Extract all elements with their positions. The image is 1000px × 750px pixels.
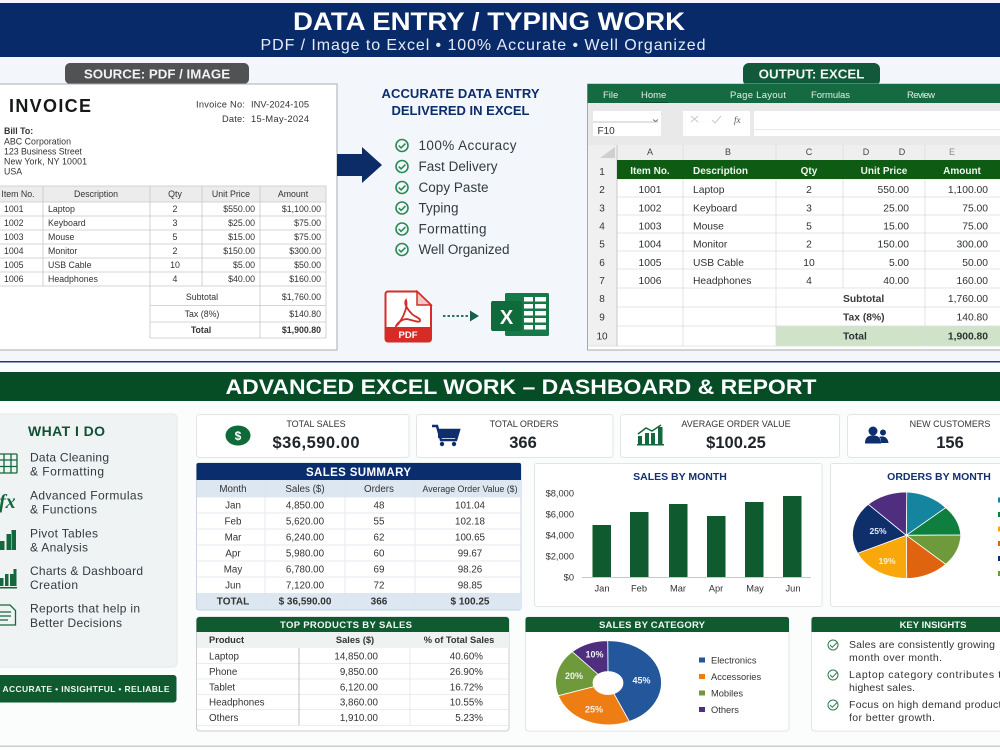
icon: Excel file: X [500, 307, 514, 329]
invoice table: $140.80 [289, 309, 321, 319]
green totals row [776, 326, 1000, 346]
KPI: total orders: TOTAL ORDERS [490, 419, 558, 429]
tagline ribbon [0, 675, 176, 702]
ribbon: File [603, 90, 618, 101]
table: sales summary: May [224, 564, 242, 576]
sheet data: Keyboard [693, 204, 737, 214]
table: sales summary: Apr [225, 548, 241, 560]
sheet data [639, 185, 988, 342]
invoice table: 1005 [4, 260, 24, 270]
sheet data: 1004 [639, 240, 662, 250]
table: sales summary: 366 [371, 596, 388, 608]
icon: PDF file: PDF [398, 330, 418, 341]
chart: sales by month: SALES BY MONTH [633, 471, 727, 483]
center heading [382, 86, 540, 118]
x axis labels: Mar [670, 584, 686, 594]
arrow: PDF to Excel [443, 310, 479, 322]
KPI: total orders: 366 [509, 434, 537, 452]
invoice table: USB Cable [48, 260, 92, 270]
item: Copy Paste: Copy Paste [418, 180, 488, 195]
invoice table: Keyboard [48, 218, 86, 228]
table: sales summary: Sales ($) [285, 484, 325, 495]
ribbon: Page Layout [730, 90, 786, 101]
invoice table: 1001 [4, 204, 24, 214]
service: pivot tables: Pivot Tables [30, 526, 98, 540]
table: sales summary: 60 [374, 548, 385, 560]
sheet data: 1,900.80 [948, 332, 988, 342]
legend [699, 656, 761, 715]
main title: DATA ENTRY / TYPING WORK [293, 8, 685, 36]
y axis labels: $6,000 [546, 510, 574, 520]
legend swatches [998, 498, 1000, 576]
KPI: average order value: $100.25 [706, 434, 766, 452]
section divider [0, 361, 1000, 362]
invoice table: $15.00 [228, 232, 255, 242]
table: sales summary: 101.04 [455, 500, 486, 512]
KPI: new customers: 156 [936, 434, 964, 452]
invoice table: 1003 [4, 232, 24, 242]
table: top products: 3,860.00 [340, 698, 379, 708]
chart: orders by month: 19% [878, 556, 896, 566]
table: top products: 1,910.00 [340, 713, 379, 724]
bill to: USA [4, 166, 22, 176]
y axis labels: $2,000 [546, 552, 574, 562]
y axis labels: $8,000 [546, 488, 574, 498]
invoice table: $550.00 [223, 204, 255, 214]
chart: sales by month [534, 464, 822, 606]
invoice table: Unit Price [212, 189, 250, 199]
table: top products: 10.55% [450, 698, 483, 708]
arrow: source to output [337, 147, 382, 183]
table: top products: Others [209, 713, 239, 724]
sheet data: 5 [806, 222, 812, 232]
invoice table: $160.00 [289, 274, 321, 284]
y axis labels: $4,000 [546, 530, 574, 540]
sheet header row [617, 160, 1000, 179]
subtitle: PDF / Image to Excel • 100% Accurate • Well Organized [260, 37, 706, 54]
invoice table: Qty [168, 189, 182, 199]
x axis labels [594, 584, 800, 594]
invoice table: 1002 [4, 218, 24, 228]
KPI: total sales: TOTAL SALES [286, 419, 346, 429]
KPI: total sales [196, 414, 409, 458]
sheet data: 160.00 [956, 276, 988, 287]
benefits checklist [396, 138, 517, 257]
column headers: B [725, 147, 731, 157]
sheet data: 4 [806, 276, 812, 287]
service: charts: Charts & Dashboard [30, 564, 143, 578]
chart title [526, 617, 789, 632]
column headers: A [647, 147, 653, 157]
invoice meta: Invoice No: [196, 100, 245, 110]
bill to: ABC Corporation [4, 136, 71, 146]
service: data cleaning: & Formatting [30, 464, 104, 478]
service: formulas [0, 488, 143, 516]
footer rule [0, 746, 1000, 747]
sheet header row: Qty [801, 166, 818, 177]
sheet data: 75.00 [962, 204, 988, 214]
chart: orders by month: ORDERS BY MONTH [887, 471, 991, 483]
table title: SALES SUMMARY [306, 467, 411, 479]
table: sales summary: Mar [225, 532, 242, 544]
service: data cleaning [0, 450, 109, 478]
panel title [812, 617, 1000, 632]
section banner: ADVANCED EXCEL WORK – DASHBOARD & REPORT [226, 376, 817, 399]
chart: sales by category: 10% [585, 650, 604, 660]
sheet data: 1,100.00 [948, 185, 988, 196]
ribbon [588, 84, 1000, 104]
table: sales summary: 98.85 [458, 580, 483, 592]
service: reports: Reports that help in [30, 602, 140, 616]
sheet data: 1005 [639, 258, 662, 269]
sheet data: Laptop [693, 185, 725, 196]
bill to: 123 Business Street [4, 146, 83, 156]
invoice meta: INV-2024-105 [251, 100, 309, 110]
table: top products: Phone [209, 667, 238, 678]
table: sales summary: 69 [374, 564, 384, 576]
service: reports: Better Decisions [30, 616, 122, 630]
column headers: D [863, 147, 870, 157]
table: sales summary: Month [219, 484, 247, 495]
output label [743, 63, 880, 86]
sheet data: 50.00 [962, 258, 988, 269]
invoice table [0, 186, 326, 338]
tagline ribbon: ACCURATE • INSIGHTFUL • RELIABLE [2, 684, 170, 694]
table: top products: % of Total Sales [424, 635, 494, 645]
chart: sales by category: 45% [632, 676, 651, 686]
sheet header row: Description [693, 166, 748, 177]
invoice table: 3 [173, 218, 178, 228]
sheet data: Tax (8%) [843, 312, 885, 324]
sheet data: 25.00 [883, 204, 909, 214]
sheet data: 300.00 [956, 240, 988, 250]
table: sales summary: 102.18 [455, 516, 486, 528]
icon: PDF file [386, 292, 431, 342]
header banner [0, 3, 1000, 57]
invoice table: Mouse [48, 232, 75, 242]
table: sales summary: 100.65 [455, 532, 486, 544]
row headers: 1 [599, 167, 605, 178]
KPI: new customers [848, 414, 1000, 458]
sheet data: Mouse [693, 222, 724, 232]
sheet data: Monitor [693, 240, 728, 250]
invoice table: $1,900.80 [282, 325, 321, 335]
y axis labels [546, 488, 574, 582]
table: top products: Headphones [209, 698, 265, 708]
service: pivot tables [0, 526, 98, 554]
section banner [0, 372, 1000, 401]
invoice table: Headphones [48, 274, 98, 284]
ribbon: Review [907, 90, 935, 101]
x axis labels: Jun [786, 584, 800, 594]
invoice table: $300.00 [289, 246, 321, 256]
invoice table: Total [191, 325, 211, 335]
invoice table: Tax (8%) [185, 309, 219, 319]
invoice table: $150.00 [223, 246, 255, 256]
invoice table: 2 [173, 204, 178, 214]
table: sales summary: 5,620.00 [286, 516, 325, 528]
sheet data: 40.00 [883, 276, 909, 287]
row headers: 10 [596, 332, 608, 342]
ribbon: Formulas [811, 90, 850, 101]
formula bar: F10 [598, 126, 615, 137]
table: sales summary: 55 [374, 516, 385, 528]
insight 3 [828, 699, 1000, 724]
bill to: New York, NY 10001 [4, 156, 87, 166]
invoice table: Subtotal [186, 292, 218, 302]
sheet data: 2 [806, 185, 812, 196]
insight 1: Sales are consistently growing [849, 639, 995, 651]
sheet data: 1001 [639, 185, 662, 196]
service: charts [0, 564, 143, 592]
column headers: D [899, 147, 906, 157]
invoice table: $50.00 [294, 260, 321, 270]
sheet header row: Amount [943, 166, 982, 177]
invoice meta: Date: [222, 114, 245, 124]
row headers: 3 [599, 204, 605, 214]
KPI: average order value [620, 414, 840, 458]
service: reports [0, 602, 140, 630]
sheet data: Headphones [693, 276, 751, 287]
invoice meta [196, 100, 309, 124]
sheet data: USB Cable [693, 258, 744, 269]
legend: Others [711, 705, 739, 715]
item: Fast Delivery: Fast Delivery [418, 159, 498, 174]
x axis labels: Apr [709, 584, 723, 594]
table: sales summary: 6,780.00 [286, 564, 325, 576]
invoice table: 4 [173, 274, 178, 284]
table: sales summary: Jan [225, 500, 241, 512]
invoice heading: INVOICE [9, 96, 91, 116]
sheet data: 1,760.00 [948, 294, 988, 305]
table: top products: 6,120.00 [340, 682, 379, 694]
invoice table: 2 [173, 246, 178, 256]
sheet data: Total [843, 332, 867, 342]
sheet data: 1002 [639, 204, 662, 214]
x axis labels: May [746, 584, 764, 594]
icon: Excel file [491, 293, 549, 336]
item: 100% Accuracy: 100% Accuracy [418, 138, 517, 153]
invoice table: Monitor [48, 246, 77, 256]
chart: sales by category: 20% [565, 671, 583, 681]
invoice table: Description [74, 189, 118, 199]
invoice table: 1006 [4, 274, 24, 284]
service: data cleaning: Data Cleaning [30, 450, 109, 464]
center heading: ACCURATE DATA ENTRY [382, 86, 540, 101]
table: sales summary: Jun [225, 580, 241, 592]
KPI: average order value: AVERAGE ORDER VALUE [681, 419, 791, 429]
insight 3: for better growth. [849, 712, 935, 724]
source label [65, 63, 249, 84]
insight 2 [828, 669, 1000, 694]
row headers: 6 [599, 258, 605, 269]
table: sales summary: 99.67 [458, 548, 482, 560]
row headers [588, 160, 617, 346]
table: top products: Laptop [209, 652, 240, 662]
sheet grid [588, 145, 1000, 346]
invoice table: $40.00 [228, 274, 255, 284]
sheet data: 1006 [639, 276, 662, 287]
insight 1: month over month. [849, 652, 942, 664]
table: top products: 16.72% [450, 682, 483, 694]
service: pivot tables: & Analysis [30, 540, 88, 554]
bars [592, 496, 802, 577]
bill to: Bill To: [4, 126, 33, 136]
output label: OUTPUT: EXCEL [759, 66, 864, 82]
table: top products: Product [209, 635, 244, 645]
table title [196, 463, 521, 480]
table: top products [196, 617, 509, 731]
x axis labels: Feb [631, 584, 647, 594]
table: top products: Sales ($) [336, 635, 374, 645]
bill to [4, 126, 87, 176]
pie [852, 492, 961, 578]
chart: sales by category [526, 617, 789, 731]
row headers: 7 [599, 276, 605, 287]
formula bar [588, 103, 1000, 145]
sheet data: 150.00 [878, 240, 909, 250]
table: sales summary: 48 [374, 500, 385, 512]
table: sales summary: Feb [225, 516, 242, 528]
sheet data: 1003 [639, 222, 662, 232]
invoice table: Amount [278, 189, 309, 199]
sheet header row: Unit Price [861, 166, 908, 177]
KPI: total sales: $36,590.00 [272, 434, 360, 452]
insight 2: highest sales. [849, 682, 915, 694]
donut [556, 641, 661, 725]
sheet data: 2 [806, 240, 812, 250]
item: Typing: Typing [418, 200, 458, 216]
panel title: KEY INSIGHTS [900, 620, 966, 631]
table: sales summary: 98.26 [458, 564, 483, 576]
KPI: total sales: $ [235, 429, 242, 443]
sheet data: Subtotal [843, 294, 884, 305]
table: top products: 26.90% [450, 667, 483, 678]
chart: sales by category: 25% [585, 704, 603, 714]
ribbon: Home [641, 90, 666, 101]
invoice table: 1004 [4, 246, 24, 256]
chart: orders by month [830, 464, 1000, 606]
center heading: DELIVERED IN EXCEL [392, 103, 530, 118]
table: sales summary: $ 36,590.00 [279, 596, 332, 608]
invoice meta: 15-May-2024 [251, 114, 309, 124]
chart: orders by month: 25% [869, 526, 887, 536]
table: sales summary: Average Order Value ($) [422, 484, 518, 494]
sheet data: 5.00 [889, 258, 909, 269]
x axis labels: Jan [594, 584, 610, 594]
sheet data: 10 [803, 258, 815, 269]
row headers: 5 [599, 240, 605, 250]
table: sales summary: TOTAL [217, 596, 249, 608]
row headers: 2 [599, 185, 605, 196]
row headers: 9 [599, 312, 605, 324]
table: sales summary: $ 100.25 [451, 596, 490, 608]
panel: key insights [812, 617, 1000, 731]
table title: TOP PRODUCTS BY SALES [280, 620, 412, 631]
table: sales summary: 5,980.00 [286, 548, 325, 560]
formula bar: fx [734, 115, 741, 125]
table: sales summary: 6,240.00 [286, 532, 325, 544]
KPI: total orders [416, 414, 613, 458]
table: sales summary: Orders [364, 484, 394, 495]
table: top products: 5.23% [455, 713, 483, 724]
invoice table: Laptop [48, 204, 75, 214]
sheet data: 3 [806, 204, 812, 214]
sheet data: 75.00 [962, 222, 988, 232]
y axis labels: $0 [564, 572, 574, 582]
invoice table: Item No. [1, 189, 35, 199]
table: top products: Tablet [209, 682, 235, 694]
table: top products: 9,850.00 [340, 667, 379, 678]
table: sales summary: 62 [374, 532, 384, 544]
panel: what I do [0, 414, 177, 667]
invoice table: 5 [173, 232, 178, 242]
invoice table: $1,760.00 [282, 292, 321, 302]
service: formulas: & Functions [30, 502, 97, 516]
invoice table: $75.00 [294, 232, 321, 242]
insight 1 [828, 639, 995, 664]
invoice table: $5.00 [233, 260, 255, 270]
legend: Electronics [711, 656, 757, 666]
sheet header row: Item No. [630, 166, 670, 177]
row headers: 4 [599, 222, 605, 232]
sheet data: 140.80 [956, 312, 988, 324]
invoice table: $1,100.00 [282, 204, 321, 214]
legend: Mobiles [711, 688, 743, 698]
panel title: WHAT I DO [28, 423, 105, 439]
KPI: new customers: NEW CUSTOMERS [910, 419, 990, 429]
table title [196, 617, 509, 632]
table: sales summary: 4,850.00 [286, 500, 325, 512]
column headers: E [949, 147, 955, 157]
item: Formatting: Formatting [418, 222, 486, 236]
service: formulas: Advanced Formulas [30, 488, 143, 502]
legend: Accessories [711, 672, 761, 682]
row headers: 8 [599, 294, 605, 305]
table: sales summary: 72 [374, 580, 384, 592]
panel: Excel sheet [588, 84, 1000, 350]
source label: SOURCE: PDF / IMAGE [84, 66, 230, 82]
table: top products: 14,850.00 [334, 652, 379, 662]
column headers: C [806, 147, 813, 157]
sheet data: 15.00 [883, 222, 909, 232]
chart title: SALES BY CATEGORY [599, 620, 706, 631]
service: charts: Creation [30, 578, 78, 592]
table: sales summary [196, 463, 521, 610]
invoice table: 10 [170, 260, 180, 270]
table: top products: 40.60% [450, 652, 483, 662]
table: sales summary: 7,120.00 [286, 580, 325, 592]
column headers [588, 145, 1000, 160]
item: Well Organized: Well Organized [418, 242, 510, 257]
sheet data: 550.00 [878, 185, 909, 196]
invoice table: $75.00 [294, 218, 321, 228]
invoice table: $25.00 [228, 218, 255, 228]
panel: invoice [0, 84, 337, 350]
